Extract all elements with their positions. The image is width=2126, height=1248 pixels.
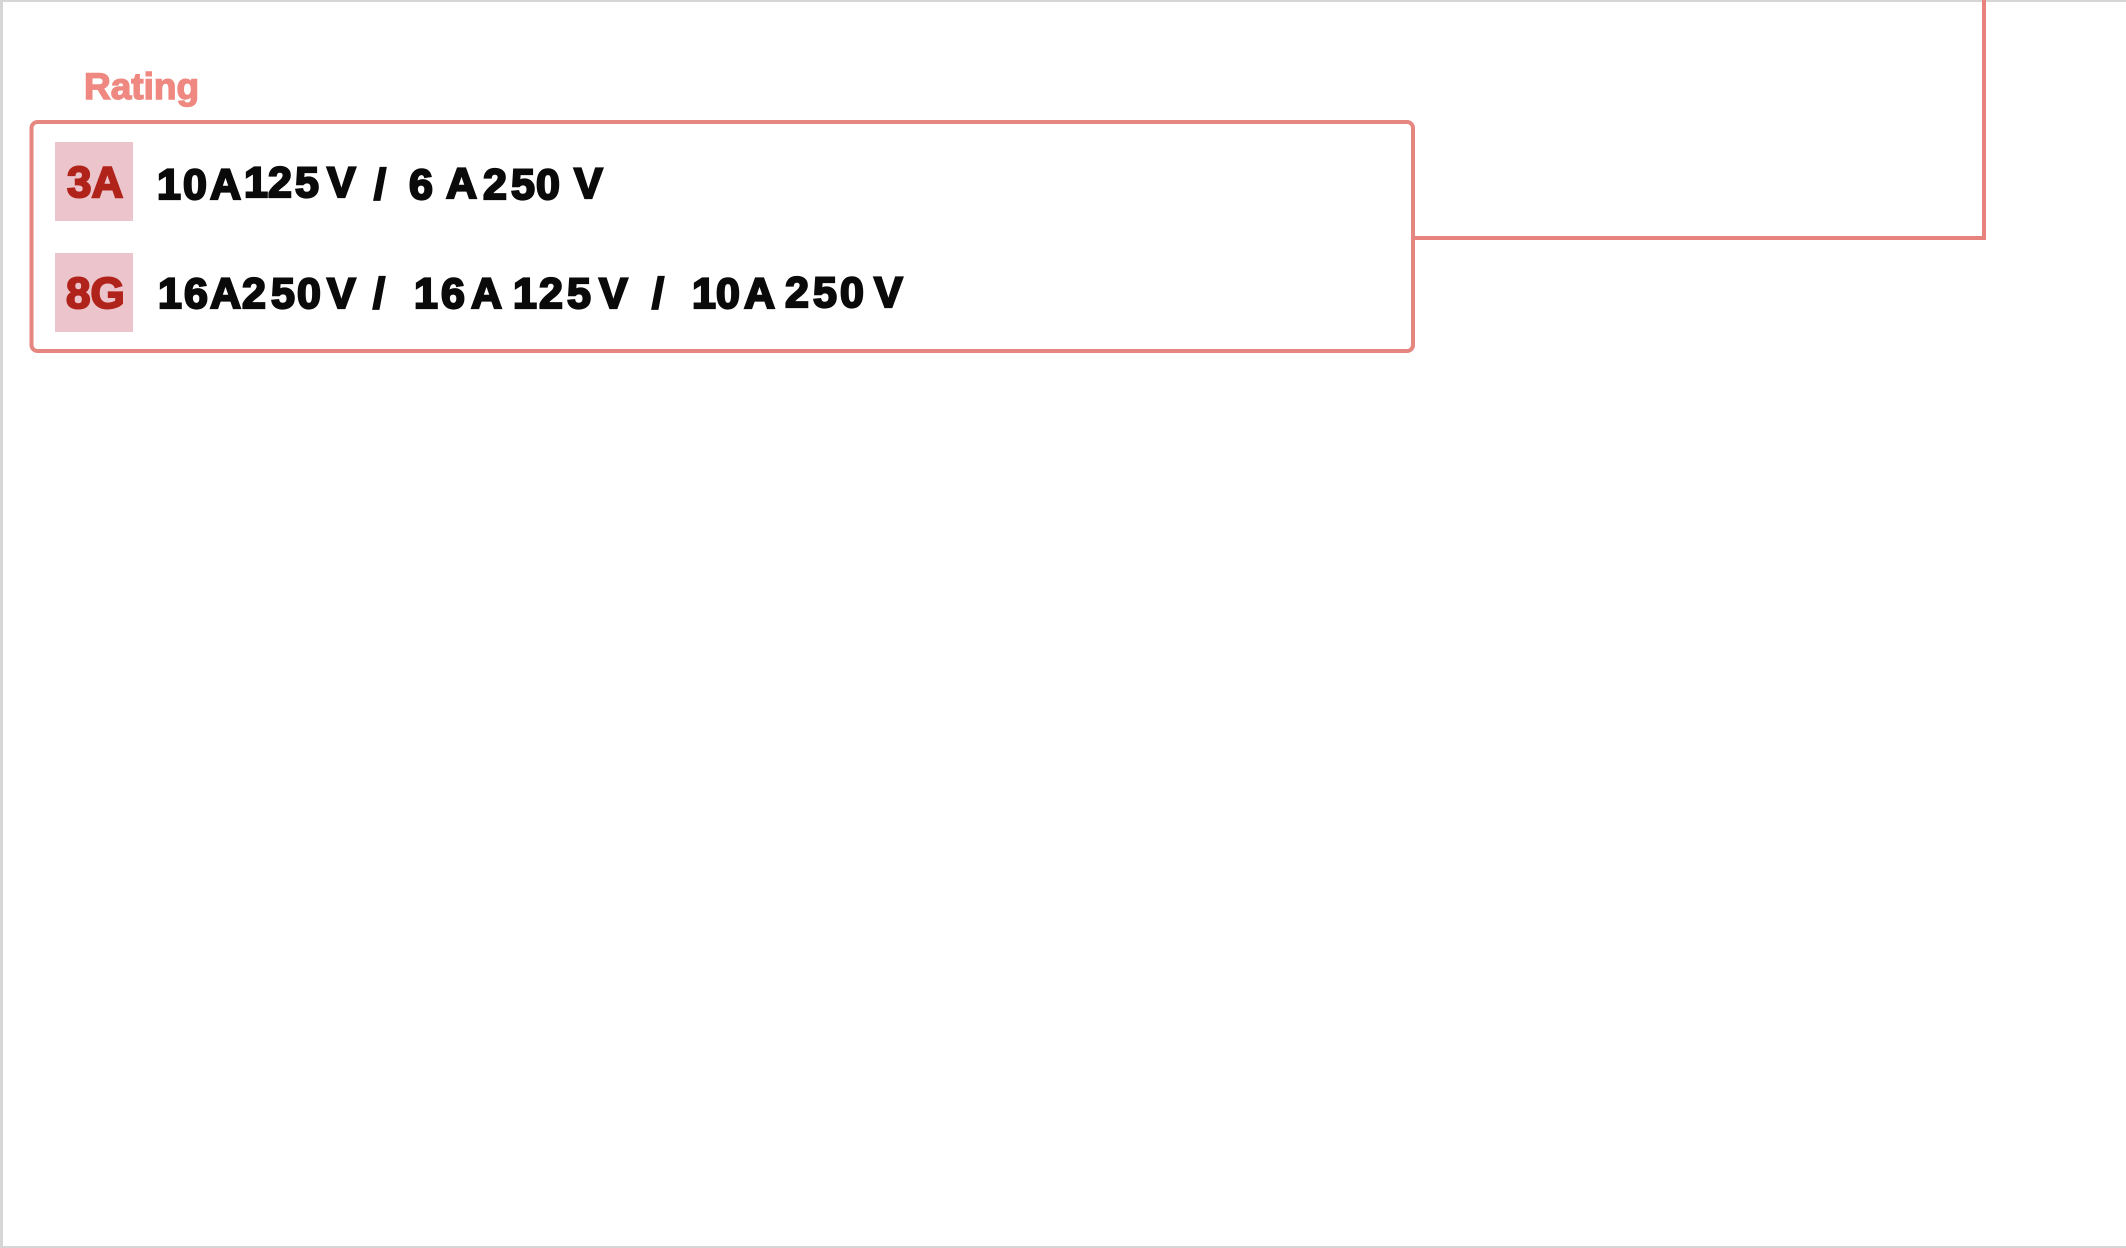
heading: Rating: Rating bbox=[84, 66, 199, 107]
row: 3A rating bbox=[55, 142, 603, 221]
badge: 3A bbox=[55, 142, 133, 221]
badge: 8G: 8G bbox=[66, 269, 125, 318]
connector line from rating panel bbox=[1413, 0, 1984, 238]
row: 8G rating bbox=[55, 253, 903, 332]
panel: rating bbox=[32, 122, 1413, 351]
values: 3A: 10A125V / 6A250V bbox=[157, 159, 603, 209]
badge: 3A: 3A bbox=[67, 158, 123, 207]
values: 8G: 16A250V / 16A125V / 10A250V bbox=[158, 269, 903, 318]
badge: 8G bbox=[55, 253, 133, 332]
panel border bbox=[32, 122, 1413, 351]
